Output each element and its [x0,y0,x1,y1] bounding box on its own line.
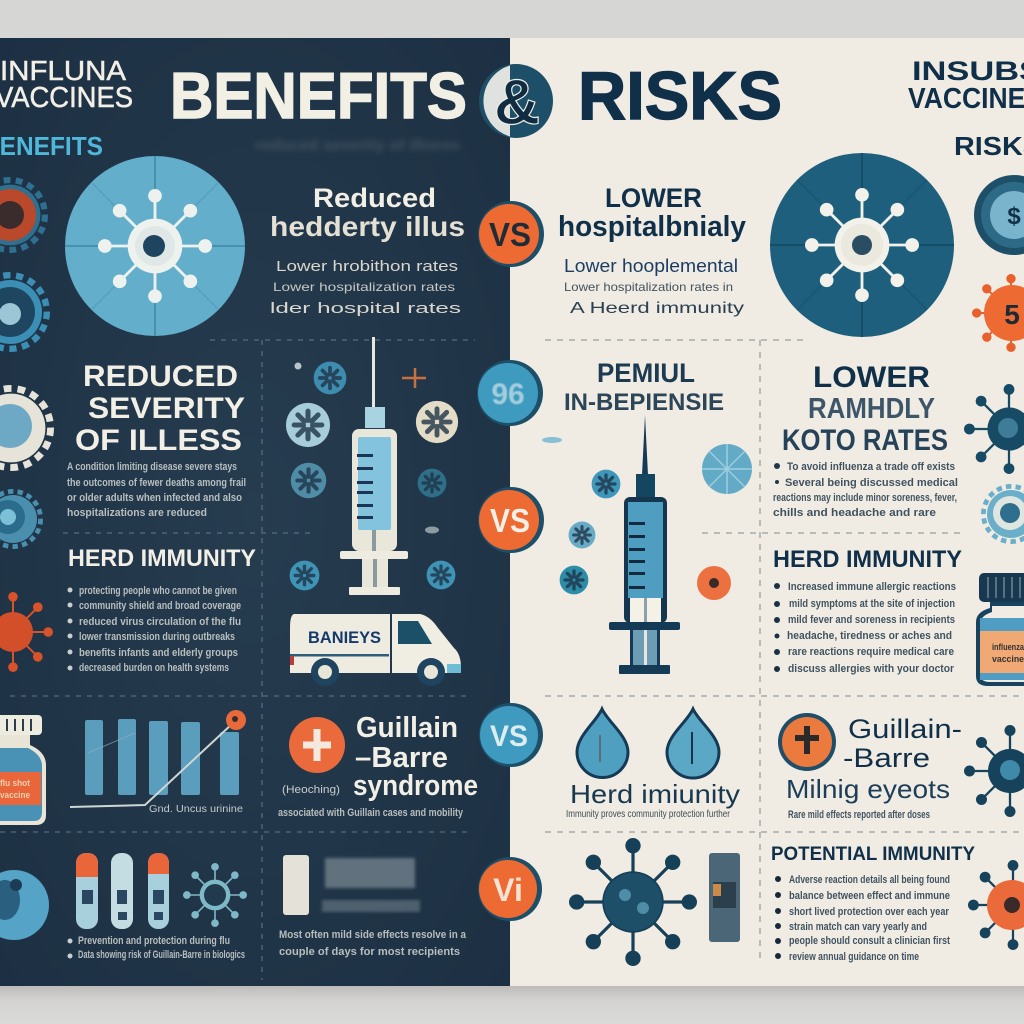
text block: reduced severity: Lower hospitalization rates [273,280,455,294]
text block: guillain-barre, benefits [278,712,478,819]
text block: reduced severity of illness: OF ILLESS [75,424,242,457]
panel: benefits background [0,38,510,986]
text block: herd immunity, benefits: HERD IMMUNITY [68,545,256,572]
icon: large dark virus [569,838,697,966]
text block: guillain-barre, risks: Milnig eyeots [786,774,950,804]
text block: lower rates, risks: chills and headache and rare [773,507,936,519]
text block: potential immunity: POTENTIAL IMMUNITY [771,844,975,865]
VS badge: orange 2: VS [490,502,530,539]
icon: ambulance van [290,614,461,686]
text block: herd immunity, risks: rare reactions require medical care [788,646,954,658]
side icon: dark virus 2 [964,725,1024,817]
dividers: risks [545,340,1024,960]
text block: lower rates, risks: To avoid influenza a trade off exists [787,461,955,473]
text block: lower rates, risks: Several being discussed medical [785,477,958,489]
text block: herd immunity, benefits: decreased burden on health systems [79,662,229,674]
text block: lower rates, risks: KOTO RATES [782,424,948,457]
icon: vaccine bottle, benefits: flu shot [0,778,30,788]
blurred subtitle: benefits: reduced severity of illness [255,137,460,154]
text block: herd immunity, risks: HERD IMMUNITY [773,546,962,573]
icon: large virus disc, benefits [65,156,245,336]
text block: lower hospitalization: Lower hospitalization rates in [564,280,733,294]
text block: bottom benefits note: couple of days for most recipients [279,946,460,958]
text block: reduced severity of illness: A condition limiting disease severe stays [67,461,237,473]
text block: guillain-barre, risks: Rare mild effects reported after doses [788,809,930,821]
header: influenza vaccines, risks side: INSUBS [912,56,1024,86]
icons: water drops [577,709,719,778]
text block: reduced severity of illness: SEVERITY [88,392,245,425]
text block: potential immunity: strain match can vary yearly and [789,921,927,933]
dividers: benefits [0,340,475,980]
VS badge: blue 2: VS [490,720,528,753]
text block: herd immunity, benefits [68,545,256,674]
text block: guillain-barre, risks: Guillain- [848,714,962,744]
block: blurred card [283,855,420,915]
icons: flu particles, benefits [286,362,458,590]
side icon: orange virus splat: 5 [1004,299,1020,330]
text block: reduced severity of illness [67,360,246,519]
icons: flu particles, risks [542,437,752,600]
text block: lower hospitalization: A Heerd immunity [570,300,744,317]
VS badge: orange 3: Vi [493,872,523,908]
bar chart with trend line: Gnd. Uncus urinine [149,804,243,815]
icon: ambulance van: BANIEYS [308,628,381,647]
text block: herd immunity drops [566,779,740,820]
text block: lower hospitalization: hospitalbnialy [558,211,746,243]
VS badge: blue 1 [477,360,543,426]
text block: reduced severity: hedderty illus [270,211,465,242]
text block: herd immunity, risks: mild symptoms at the site of injection [789,598,955,610]
header: influenza vaccines, benefits side [0,55,133,114]
side icon: dark dial [974,175,1024,255]
side icon: blue gear, risks [983,486,1024,542]
text block: herd immunity, benefits: reduced virus circulation of the flu [79,616,241,628]
text block: potential immunity: review annual guidance on time [789,951,919,963]
title: risks: RISKS [578,58,782,134]
text block: guillain-barre, risks [778,713,962,821]
text block: guillain-barre, risks: -Barre [843,743,930,773]
text block: lower hospitalization [558,183,746,317]
text block: premium in-dependence: IN-BEPIENSIE [564,389,724,416]
title: benefits: BENEFITS [170,59,467,132]
side icon: dark virus [964,384,1024,474]
icon: vaccine bottle, benefits [0,715,46,825]
header: influenza vaccines, benefits side: INFLUNA [0,55,126,86]
text block: tube bullets: Data showing risk of Guillain-Barre in biologics [78,949,245,961]
text block: reduced severity of illness: REDUCED [83,360,238,393]
text block: reduced severity of illness: or older adults when infected and also [67,492,242,504]
text block: reduced severity of illness: the outcomes of fewer deaths among frail [67,477,246,489]
text block: potential immunity: balance between effect and immune [789,890,950,902]
side icon: blue gear [0,491,41,547]
text block: reduced severity: Lower hrobithon rates [276,258,458,275]
text block: reduced severity of illness: hospitalizations are reduced [67,507,207,519]
side icon: orange virus [0,592,53,672]
side icon: dark dial: $ [1007,203,1021,230]
icon: small vial [709,853,740,942]
text block: potential immunity: short lived protection over each year [789,906,950,918]
text block: herd immunity, benefits: lower transmission during outbreaks [79,631,235,643]
text block: lower hospitalization: LOWER [605,183,702,213]
VS badge: orange 1 [478,201,544,267]
text block: tube bullets: Prevention and protection during flu [78,935,230,947]
text block: guillain-barre, benefits: –Barre [355,742,448,774]
text block: herd immunity, benefits: benefits infants and elderly groups [79,647,238,659]
text block: reduced severity: Reduced [313,183,436,213]
text block: potential immunity: people should consult a clinician first [789,935,950,947]
text block: lower rates, risks: LOWER [813,361,930,394]
VS badge: blue 1: 96 [491,378,525,411]
ampersand badge: & [494,66,540,138]
icon: vaccine bottle, risks [976,573,1024,686]
text block: premium in-dependence [564,358,724,416]
VS badge: blue 2 [479,703,543,767]
text block: guillain-barre, benefits: syndrome [353,770,478,802]
text block: herd immunity drops: Immunity proves community protection further [566,809,731,820]
text block: reduced severity [270,183,465,317]
icon: vaccine bottle, benefits: vaccine [0,790,30,800]
side icon: orange virus splat [972,274,1024,352]
side icon: orange ring badge [0,180,45,250]
text block: bottom benefits note: Most often mild side effects resolve in a [279,929,467,941]
icons: test tubes [76,853,169,929]
side icon: blue blob [0,870,49,940]
text block: lower rates, risks: reactions may include minor soreness, fever, [773,492,957,504]
text block: lower rates, risks [773,361,958,519]
text block: potential immunity [771,844,975,963]
text block: lower rates, risks: RAMHDLY [808,393,935,425]
text block: potential immunity: Adverse reaction details all being found [789,874,950,886]
text block: herd immunity, risks: discuss allergies with your doctor [788,663,955,675]
VS badge: orange 2 [478,487,544,553]
text block: herd immunity, benefits: community shield and broad coverage [79,600,241,612]
VS badge: orange 1: VS [489,216,531,253]
text block: herd immunity, risks: Increased immune allergic reactions [788,581,956,593]
text block: bottom benefits note [279,929,467,958]
text block: herd immunity, risks [773,546,962,675]
text block: lower hospitalization: Lower hooplemental [564,256,738,276]
VS badge: orange 3 [478,857,542,921]
text block: guillain-barre, benefits: Guillain [356,712,458,744]
icon: snowflake molecule [183,863,247,927]
panel: risks background [510,38,1024,986]
text block: guillain-barre, benefits: associated with Guillain cases and mobility [278,807,464,819]
icon: syringe, risks [609,415,680,674]
ampersand badge [479,64,553,138]
text block: herd immunity, risks: mild fever and soreness in recipients [788,614,955,626]
text block: herd immunity drops: Herd imiunity [570,779,740,809]
bar chart with trend line [70,710,246,815]
side icon: cream clock virus [0,388,51,468]
text block: reduced severity: lder hospital rates [270,300,461,317]
side icon: orange core virus [968,860,1024,950]
icon: large virus disc, risks [770,153,954,337]
side icon: blue gauge badge [0,275,47,349]
text block: herd immunity, risks: headache, tiredness or aches and [787,630,952,642]
text block: guillain-barre, benefits: (Heoching) [282,784,340,796]
text block: herd immunity, benefits: protecting people who cannot be given [79,585,237,597]
header: influenza vaccines, risks side [908,56,1024,115]
icon: syringe, benefits [340,337,408,595]
text block: tube bullets [68,935,245,961]
text block: premium in-dependence: PEMIUL [597,358,695,388]
